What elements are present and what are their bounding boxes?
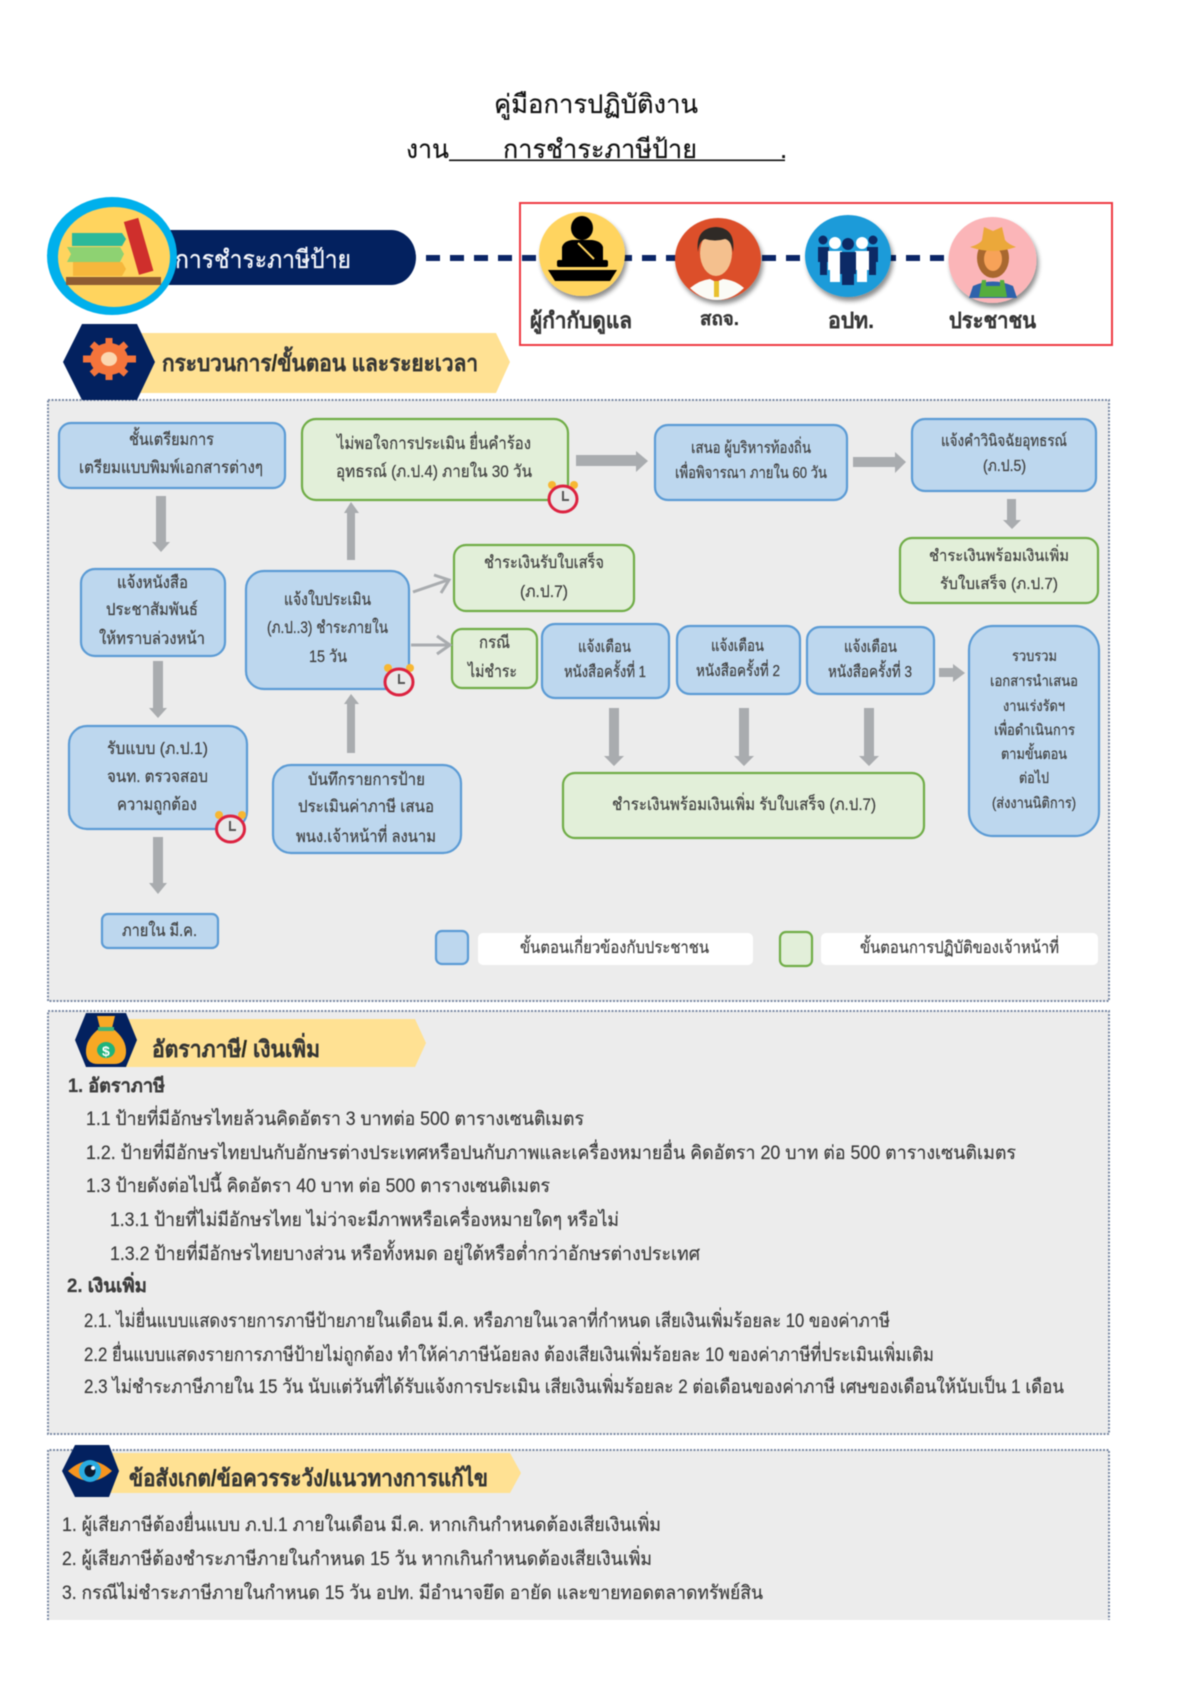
arrow: up to appeal: [344, 502, 359, 560]
arrow: to documents: [939, 664, 965, 682]
step: public announcement: ประชาสัมพันธ์: [106, 600, 198, 619]
title: งาน: [406, 134, 449, 164]
step: appeal decision: [912, 419, 1096, 491]
icon: alarm clock 3: [215, 811, 246, 842]
icon: eye: [68, 1460, 112, 1482]
observations list: 3. กรณีไม่ชำระภาษีภายในกำหนด 15 วัน อปท. มีอำนาจยึด อายัด และขายทอดตลาดทรัพย์สิน: [62, 1582, 763, 1604]
section heading: rates: อัตราภาษี/ เงินเพิ่ม: [152, 1032, 320, 1062]
section heading: observations: [62, 1445, 521, 1497]
surcharge list: 2.1. ไม่ยื่นแบบแสดงรายการภาษีป้ายภายในเดือน มี.ค. หรือภายในเวลาที่กำหนด เสียเงินเพิ่มร้อยละ 10 ของค่าภาษี: [84, 1307, 890, 1332]
step: appeal: ไม่พอใจการประเมิน ยื่นคำร้อง: [335, 431, 531, 453]
role labels: [530, 308, 1036, 335]
step: reminder 3: [807, 627, 934, 694]
step: pay with surcharge: ชำระเงินพร้อมเงินเพิ่ม รับใบเสร็จ (ภ.ป.7): [612, 792, 876, 814]
step: reminder 2: แจ้งเตือน: [711, 637, 764, 655]
icon: money bag: [86, 1016, 126, 1064]
step: record sign list: พนง.เจ้าหน้าที่ ลงนาม: [296, 824, 436, 846]
icon: citizen: [948, 217, 1036, 303]
rates list: 1.3.2 ป้ายที่มีอักษรไทยบางส่วน หรือทั้งหมด อยู่ใต้หรือต่ำกว่าอักษรต่างประเทศ: [110, 1240, 700, 1265]
step: non-payment: ไม่ชำระ: [466, 661, 517, 681]
icon: gear: [83, 338, 136, 380]
surcharge list: [67, 1272, 1064, 1398]
step: record sign list: [273, 765, 461, 853]
step: reminder 2: หนังสือครั้งที่ 2: [696, 659, 780, 680]
role labels: ประชาชน: [949, 308, 1036, 333]
step: pay with surcharge receipt: ชำระเงินพร้อมเงินเพิ่ม: [929, 544, 1069, 565]
step: appeal decision: แจ้งคำวินิจฉัยอุทธรณ์: [941, 431, 1067, 451]
step: reminder 1: แจ้งเตือน: [578, 638, 631, 656]
step: propose to local executive: เสนอ ผู้บริหารท้องถิ่น: [691, 436, 811, 458]
step: within March: ภายใน มี.ค.: [122, 920, 197, 940]
title: .: [780, 134, 787, 164]
role labels: สถจ.: [700, 309, 739, 330]
icon: local government staff: [805, 215, 891, 297]
icon: money bag: $: [102, 1043, 110, 1059]
step: appeal decision: (ภ.ป.5): [983, 458, 1026, 475]
step: public announcement: แจ้งหนังสือ: [117, 573, 188, 592]
step: assessment notice: (ภ.ป..3) ชำระภายใน: [267, 617, 388, 637]
observations list: 2. ผู้เสียภาษีต้องชำระภาษีภายในกำหนด 15 วัน หากเกินกำหนดต้องเสียเงินเพิ่ม: [62, 1545, 652, 1570]
title: [406, 89, 787, 164]
step: collect documents: [969, 626, 1099, 836]
step: receive form: ความถูกต้อง: [117, 795, 197, 815]
step: collect documents: รวบรวม: [1012, 648, 1057, 665]
arrow: down 2: [149, 661, 167, 718]
step: pay with surcharge: [563, 773, 924, 838]
section heading: process: [63, 324, 510, 400]
step: collect documents: เอกสารนำเสนอ: [990, 673, 1078, 690]
step: assessment notice: 15 วัน: [309, 647, 347, 666]
title: คู่มือการปฏิบัติงาน: [494, 89, 698, 120]
legend: [436, 931, 1098, 966]
step: pay and receive receipt: ชำระเงินรับใบเสร็จ: [484, 551, 604, 572]
step: preparation: ชั้นเตรียมการ: [129, 427, 214, 449]
rates list: 1.3 ป้ายดังต่อไปนี้ คิดอัตรา 40 บาท ต่อ 500 ตารางเซนติเมตร: [86, 1172, 550, 1197]
step: reminder 2: [677, 626, 800, 694]
step: receive form: รับแบบ (ภ.ป.1): [107, 739, 208, 758]
step: preparation: เตรียมแบบพิมพ์เอกสารต่างๆ: [79, 458, 263, 477]
step: reminder 1: [542, 624, 669, 698]
step: pay with surcharge receipt: รับใบเสร็จ (ภ.ป.7): [940, 573, 1058, 593]
icon: supervisor: [539, 212, 625, 296]
step: receive form: [69, 726, 247, 829]
step: record sign list: ประเมินค่าภาษี เสนอ: [298, 797, 434, 816]
icon: alarm clock 1: [548, 481, 578, 512]
step: collect documents: ต่อไป: [1019, 769, 1049, 787]
step: reminder 1: หนังสือครั้งที่ 1: [564, 660, 646, 681]
arrow: to receipt: [413, 575, 449, 593]
surcharge list: 2.2 ยื่นแบบแสดงรายการภาษีป้ายไม่ถูกต้อง ทำให้ค่าภาษีน้อยลง ต้องเสียเงินเพิ่มร้อยละ 10 ของค่าภาษีที่ประเมินเพิ่มเติม: [84, 1341, 934, 1366]
section heading: observations: ข้อสังเกต/ข้อควรระวัง/แนวทางการแก้ไข: [129, 1464, 488, 1491]
rates list: 1. อัตราภาษี: [68, 1075, 165, 1097]
icon: alarm clock 2: [384, 664, 414, 695]
step: collect documents: ตามขั้นตอน: [1001, 743, 1067, 763]
section heading: rates: [75, 1013, 426, 1067]
step: receive form: จนท. ตรวจสอบ: [107, 767, 208, 786]
step: pay with surcharge receipt: [900, 538, 1098, 603]
step: record sign list: บันทึกรายการป้าย: [308, 770, 425, 789]
step: non-payment: [452, 629, 537, 688]
step: pay and receive receipt: [454, 545, 634, 611]
section heading: process: กระบวนการ/ขั้นตอน และระยะเวลา: [162, 346, 478, 376]
panel: tax rates and surcharges: [48, 1011, 1109, 1434]
roles box: [520, 203, 1112, 345]
step: assessment notice: [246, 571, 409, 689]
step: reminder 3: แจ้งเตือน: [844, 638, 897, 656]
title: การชำระภาษีป้าย: [503, 134, 697, 164]
rates list: 1.2. ป้ายที่มีอักษรไทยปนกับอักษรต่างประเทศหรือปนกับภาพและเครื่องหมายอื่น คิดอัตรา 20 บาท ต่อ 500 ตารางเซนติเมตร: [86, 1139, 1016, 1164]
observations list: [62, 1511, 763, 1604]
step: assessment notice: แจ้งใบประเมิน: [284, 589, 371, 609]
step: within March: [102, 914, 218, 948]
step: reminder 3: หนังสือครั้งที่ 3: [828, 660, 912, 681]
legend: ขั้นตอนเกี่ยวข้องกับประชาชน: [520, 935, 709, 957]
step: public announcement: ให้ทราบล่วงหน้า: [99, 628, 205, 648]
arrow: reminder 1 down: [604, 708, 624, 766]
step: collect documents: เพื่อดำเนินการ: [994, 719, 1075, 739]
observations list: 1. ผู้เสียภาษีต้องยื่นแบบ ภ.ป.1 ภายในเดือน มี.ค. หากเกินกำหนดต้องเสียเงินเพิ่ม: [62, 1511, 661, 1536]
arrow: to non-payment: [411, 636, 450, 654]
role labels: ผู้กำกับดูแล: [530, 308, 632, 335]
step: propose to local executive: เพื่อพิจารณา ภายใน 60 วัน: [675, 461, 827, 482]
arrow: reminder 2 down: [734, 708, 754, 766]
icon: official: [675, 218, 761, 300]
step: public announcement: [81, 569, 225, 656]
dashed connector line: [416, 255, 944, 261]
arrow: up to assessment: [344, 694, 359, 753]
rates list: 1.1 ป้ายที่มีอักษรไทยล้วนคิดอัตรา 3 บาทต่อ 500 ตารางเซนติเมตร: [86, 1105, 584, 1130]
step: collect documents: งานเร่งรัดฯ: [1003, 698, 1065, 715]
arrow: right to executive: [576, 451, 648, 472]
surcharge list: 2.3 ไม่ชำระภาษีภายใน 15 วัน นับแต่วันที่ได้รับแจ้งการประเมิน เสียเงินเพิ่มร้อยละ 2 ต่อเดือนของค่าภาษี เศษของเดือนให้นับเป็น 1 เดือน: [84, 1373, 1064, 1398]
step: pay and receive receipt: (ภ.ป.7): [520, 582, 568, 601]
arrow: down 3: [149, 837, 167, 894]
step: non-payment: กรณี: [479, 633, 510, 652]
role labels: อปท.: [828, 308, 874, 333]
arrow: down 1: [152, 496, 170, 552]
surcharge list: 2. เงินเพิ่ม: [67, 1272, 147, 1297]
panel: observations: [48, 1445, 1109, 1620]
step: collect documents: (ส่งงานนิติการ): [992, 795, 1076, 812]
step: appeal: อุทธรณ์ (ภ.ป.4) ภายใน 30 วัน: [336, 461, 532, 482]
legend: ขั้นตอนการปฏิบัติของเจ้าหน้าที่: [860, 935, 1059, 957]
step: preparation: [59, 423, 285, 488]
step: propose to local executive: [655, 425, 847, 500]
panel: process flow: [48, 324, 1109, 1001]
icon: books: [47, 197, 177, 315]
rates list: 1.3.1 ป้ายที่ไม่มีอักษรไทย ไม่ว่าจะมีภาพหรือเครื่องหมายใดๆ หรือไม่: [110, 1206, 619, 1231]
banner: tax name: การชำระภาษีป้าย: [175, 246, 351, 274]
banner: tax name: [47, 197, 416, 315]
step: appeal: [302, 419, 568, 500]
arrow: right to decision: [853, 452, 906, 473]
arrow: down to payment: [1003, 499, 1021, 529]
arrow: reminder 3 down: [859, 708, 879, 766]
rates list: [68, 1075, 1016, 1265]
